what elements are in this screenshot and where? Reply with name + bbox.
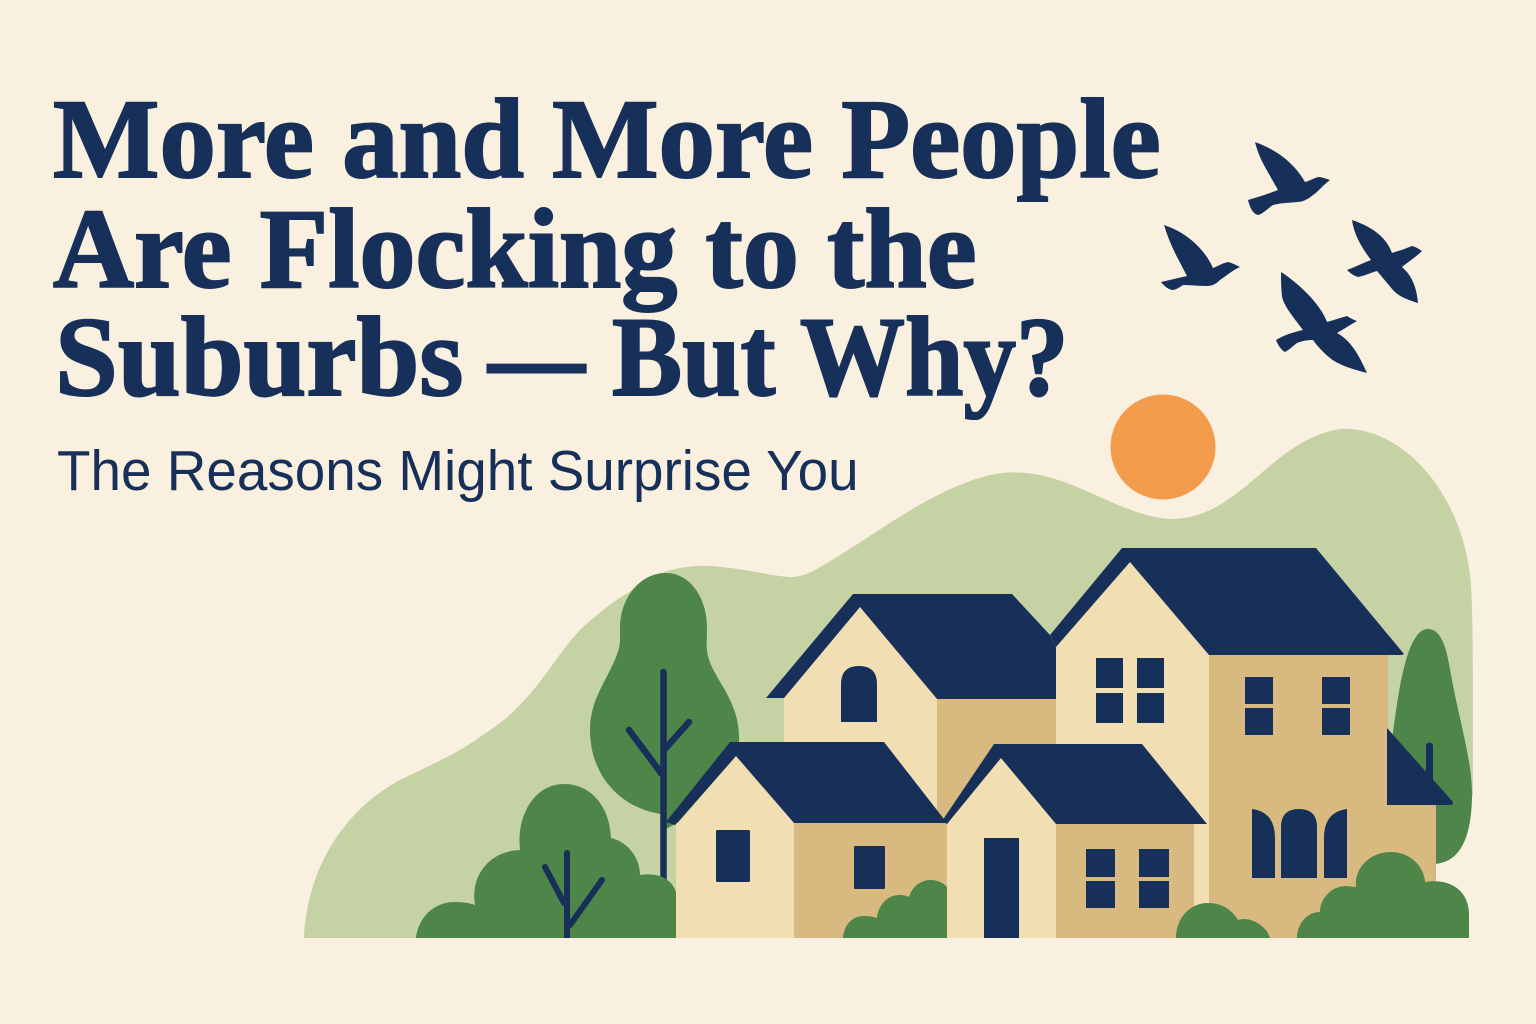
hill <box>304 429 1473 938</box>
right house <box>1050 548 1453 938</box>
icon: birds <box>1161 142 1422 373</box>
lower left house <box>666 742 947 938</box>
tree: right <box>1392 629 1472 864</box>
bush: centre <box>843 880 947 938</box>
bush: lower right small <box>1176 903 1270 938</box>
icon: sun <box>1110 394 1216 500</box>
title: Suburbs <box>55 295 463 420</box>
bush: right <box>1297 852 1469 938</box>
middle house <box>766 594 1056 825</box>
title: Are Flocking to the <box>53 187 977 312</box>
subtitle: The Reasons Might Surprise You <box>57 439 859 503</box>
title: — <box>488 295 585 420</box>
bush: front left with sapling <box>416 784 676 938</box>
tree: large left <box>590 573 739 882</box>
title: More and More People <box>53 77 1161 202</box>
title: But Why? <box>612 295 1069 420</box>
title <box>53 77 1161 420</box>
lower middle house <box>942 744 1207 938</box>
